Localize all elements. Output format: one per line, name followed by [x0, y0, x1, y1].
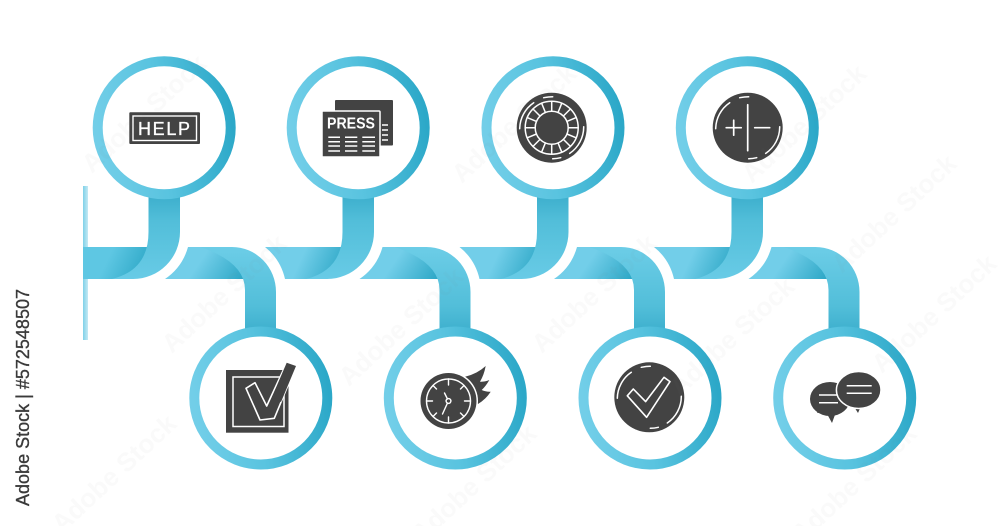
icon: press papers	[322, 100, 393, 157]
connector: step 6	[554, 247, 665, 332]
watermarks: Adobe Stock	[333, 261, 470, 392]
ring: speech	[778, 332, 911, 464]
ring: help	[98, 61, 231, 194]
left edge line	[83, 186, 88, 340]
ring: check	[584, 332, 716, 464]
icon: casino chip	[517, 93, 587, 163]
watermarks: Adobe Stock	[446, 58, 583, 189]
connector ribbon	[83, 196, 860, 332]
watermarks: Adobe Stock	[76, 48, 213, 179]
icon: help sign	[129, 112, 200, 144]
watermarks: Adobe Stock	[526, 228, 663, 359]
connector: step 8	[748, 247, 860, 332]
help label: HELP	[138, 119, 190, 139]
connector: step 4	[360, 247, 470, 332]
watermarks: Adobe Stock	[826, 148, 963, 279]
watermarks: Adobe Stock	[156, 228, 293, 359]
icon: check mark	[614, 362, 684, 432]
connector: step 2	[165, 247, 276, 332]
press label: PRESS	[327, 115, 375, 132]
watermarks: Adobe Stock	[866, 248, 1000, 379]
icon: speech bubbles	[810, 372, 881, 423]
connector: step 1 to trunk	[83, 196, 180, 279]
connector: step 7	[654, 196, 763, 279]
ring: press	[292, 61, 425, 194]
watermarks: Adobe Stock	[736, 58, 873, 189]
ring: clock	[389, 332, 522, 464]
connector: step 3	[265, 196, 374, 279]
ring: plus minus	[681, 61, 814, 194]
ring: checkbox	[194, 332, 327, 464]
stock id text: Adobe Stock | #572548507	[13, 289, 33, 506]
icon: fast clock	[419, 366, 491, 430]
watermarks: Adobe Stock	[664, 271, 801, 402]
icon: plus minus	[713, 93, 783, 163]
connector: step 5	[460, 196, 568, 279]
ring: chip	[486, 61, 620, 194]
icon: checkbox	[226, 363, 296, 433]
